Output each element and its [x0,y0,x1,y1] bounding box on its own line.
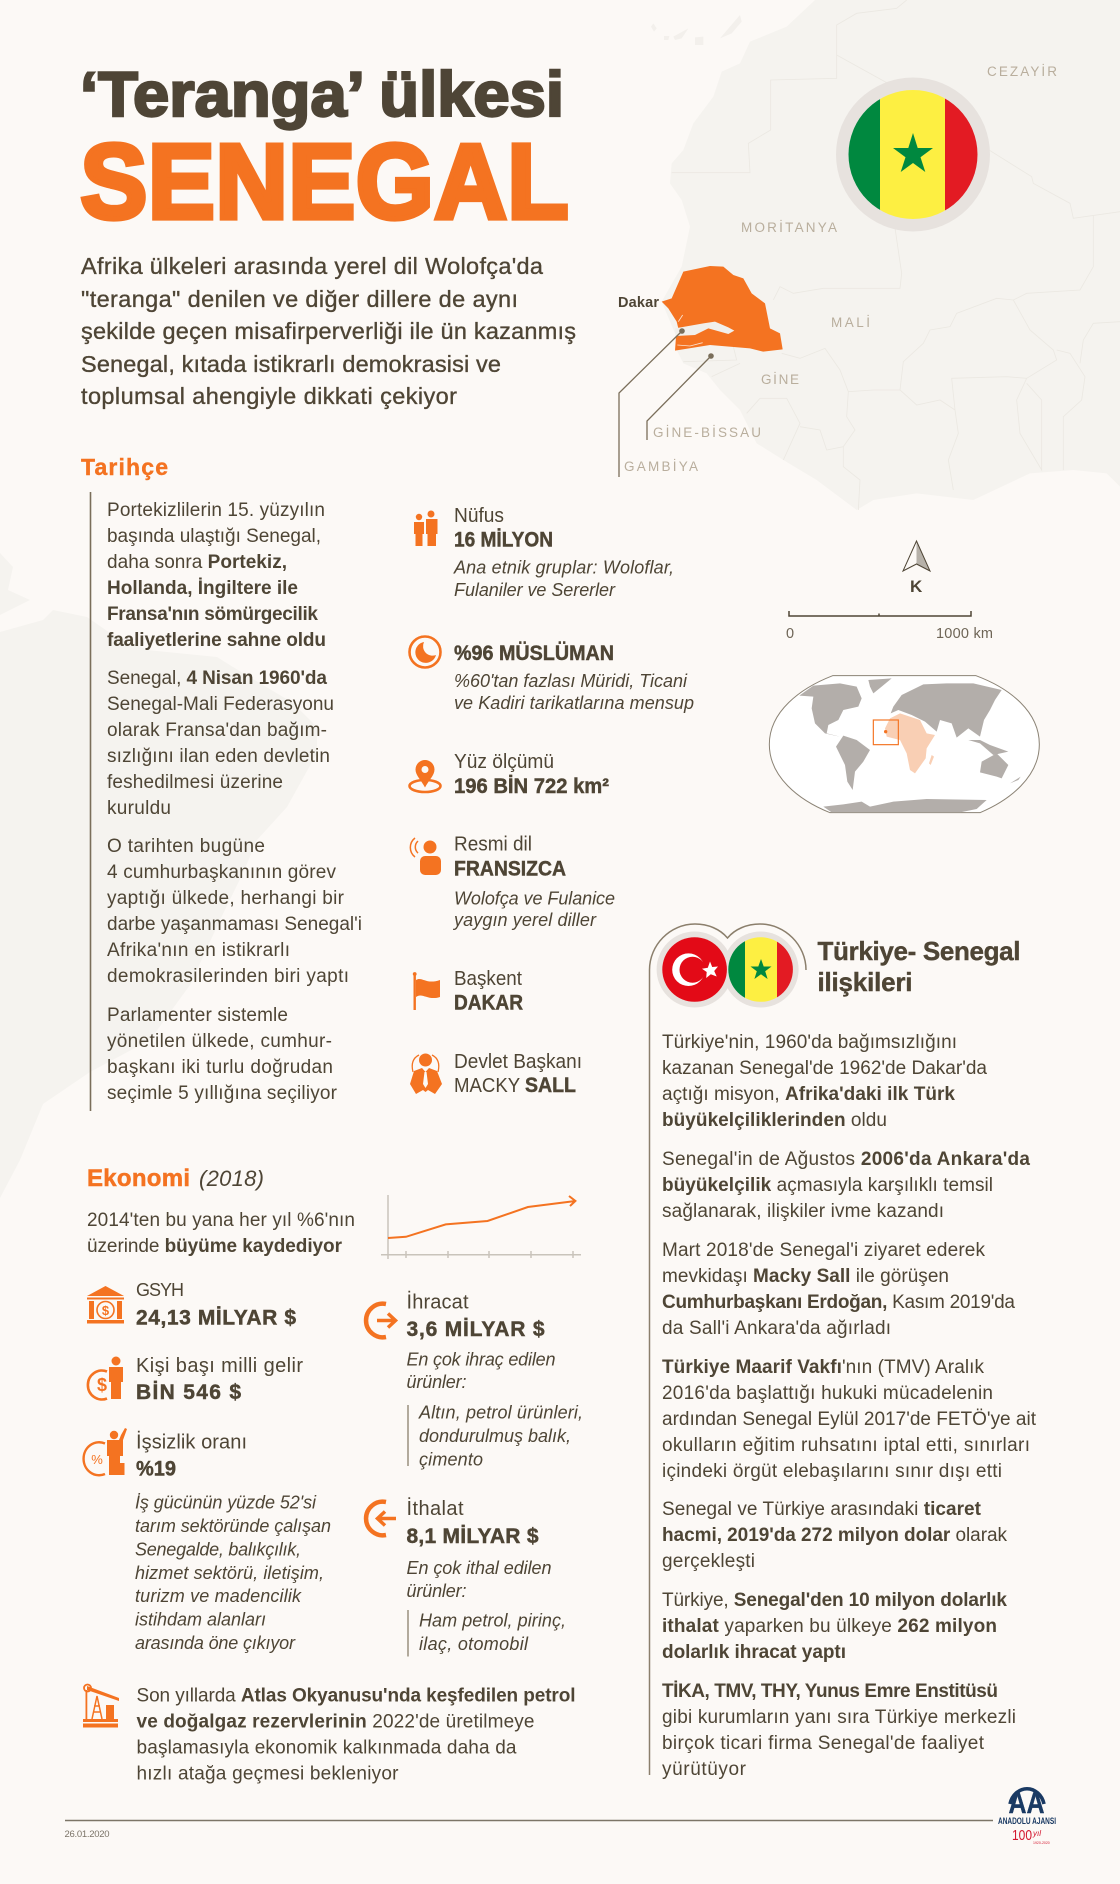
panel: history text: darbe yaşanmaması Senegal'i [107,914,362,935]
stat: religion: %96 MÜSLÜMAN [454,642,614,665]
panel: history text: Senegal, 4 Nisan 1960'da [107,668,327,689]
heading: Tarihçe: Tarihçe [81,454,168,480]
stat: president [410,1051,582,1097]
panel: history text: olarak Fransa'dan bağım- [107,720,327,741]
scale bar: 1000 km [936,626,993,642]
relations text: gerçekleşti [662,1551,755,1572]
stat: imports: En çok ithal edilen [406,1558,552,1578]
panel: history text: sızlığını ilan eden devletin [107,746,330,767]
logo: Anadolu Ajansı: 1920-2020 [1033,1841,1050,1845]
stat: exports: çimento [419,1450,483,1470]
stat: imports: ilaç, otomobil [419,1634,529,1654]
stat: unemployment: Senegalde, balıkçılık, [135,1540,301,1560]
stat: religion: ve Kadiri tarikatlarına mensup [454,693,694,713]
stat: imports: 8,1 MİLYAR $ [406,1525,539,1548]
stat: unemployment [84,1428,331,1653]
oil and gas text [136,1686,576,1784]
stat: president: MACKY SALL [454,1074,576,1097]
icon: person and dollar [88,1356,123,1400]
icon: export arrow [366,1304,396,1337]
relations text: dolarlık ihracat yaptı [662,1642,846,1663]
icon: bank: $ [102,1303,110,1318]
intro text: Afrika ülkeleri arasında yerel dil Wolofça'da [81,253,544,279]
intro text: şekilde geçen misafirperverliği ile ün kazanmış [81,318,576,344]
stat: unemployment: turizm ve madencilik [135,1586,302,1606]
icon: speaker [410,838,441,875]
intro text: Senegal, kıtada istikrarlı demokrasisi ve [81,351,501,377]
relations text: kazanan Senegal'de 1962'de Dakar'da [662,1058,987,1079]
scale bar: 0 [786,626,794,642]
icon: bank [87,1286,124,1324]
stat: exports [366,1290,583,1470]
icon: crescent [410,636,440,668]
stat: capital [413,968,523,1014]
panel: history text: seçimle 5 yıllığına seçiliyor [107,1083,338,1104]
relations text: Mart 2018'de Senegal'i ziyaret ederek [662,1240,986,1261]
date: 26.01.2020 [64,1829,110,1840]
heading: Ekonomi: (2018) [199,1166,264,1191]
stat: unemployment: hizmet sektörü, iletişim, [135,1563,324,1583]
panel: history text: demokrasilerinden biri yaptı [107,966,349,987]
icon: import arrow [366,1502,396,1535]
stat: imports: İthalat [406,1497,464,1520]
intro text: "teranga" denilen ve diğer dillere de aynı [81,286,518,312]
panel: history text: feshedilmesi üzerine [107,772,283,793]
stat: exports: İhracat [406,1290,469,1314]
panel: history text: başkanı iki turlu doğrudan [107,1057,333,1078]
relations text: hacmi, 2019'da 272 milyon dolar olarak [662,1525,1008,1546]
country labels: GAMBİYA [624,459,698,474]
panel: history text [90,492,362,1111]
relations text: sağlanarak, ilişkiler ivme kazandı [662,1201,944,1222]
world locator map [769,676,1039,813]
oil and gas text: ve doğalgaz rezervlerinin 2022'de üretilmeye [136,1712,534,1732]
relations text: büyükelçiliklerinden oldu [662,1110,887,1131]
stat: language: Wolofça ve Fulanice [454,888,615,908]
stat: population: Nüfus [454,505,504,527]
stat: unemployment: arasında öne çıkıyor [135,1633,296,1653]
relations text: Türkiye'nin, 1960'da bağımsızlığını [662,1032,957,1053]
label: Dakar: Dakar [618,295,659,311]
stat: capital: DAKAR [454,992,523,1014]
heading [818,936,1020,997]
stat: language [410,834,615,930]
stat: population [414,505,674,600]
icon: Turkish and Senegal flags [657,932,799,1008]
intro text [81,253,576,409]
scale bar [786,611,993,642]
panel: history text: Afrika'nın en istikrarlı [107,940,290,961]
stat: imports: ürünler: [406,1581,466,1601]
relations text: gibi kurumların yanı sıra Türkiye merkezli [662,1707,1016,1728]
relations text: okulların eğitim ruhsatını iptal etti, sınırları [662,1435,1030,1456]
panel: history text: O tarihten bugüne [107,836,265,857]
relations text: büyükelçilik açmasıyla karşılıklı temsil [662,1175,993,1196]
relations text: Senegal ve Türkiye arasındaki ticaret [662,1499,982,1520]
economy growth text [87,1210,355,1257]
country labels [624,64,1057,474]
intro text: toplumsal ahengiyle dikkati çekiyor [81,383,457,409]
icon: oil pump [83,1684,119,1728]
stat: imports: Ham petrol, pirinç, [419,1610,566,1630]
stat: GDP [87,1280,296,1330]
title: SENEGAL [80,122,568,241]
title: ‘Teranga’ ülkesi [80,60,564,130]
relations text: ardından Senegal Eylül 2017'de FETÖ'ye ait [662,1409,1037,1430]
stat: area: Yüz ölçümü [454,751,554,773]
country labels: GİNE [761,372,799,387]
stat: exports: Altın, petrol ürünleri, [418,1402,583,1422]
relations text: mevkidaşı Macky Sall ile görüşen [662,1266,949,1287]
relations text: Cumhurbaşkanı Erdoğan, Kasım 2019'da [662,1292,1015,1313]
stat: president: Devlet Başkanı [454,1051,582,1073]
economy growth text: 2014'ten bu yana her yıl %6'nın [87,1210,355,1231]
logo: Anadolu Ajansı: yıl [1032,1829,1041,1838]
heading: Türkiye- Senegal [818,936,1020,966]
economy growth text: üzerinde büyüme kaydediyor [87,1236,343,1257]
icon: Senegal flag [836,78,990,232]
panel: history text: yaptığı ülkede, herhangi bir [107,888,345,909]
stat: unemployment: %19 [136,1458,176,1480]
relations text [662,1032,1037,1780]
panel: history text: 4 cumhurbaşkanının görev [107,862,336,883]
relations text: birçok ticari firma Senegal'de faaliyet [662,1733,985,1754]
panel: history text: yönetilen ülkede, cumhur- [107,1031,332,1052]
relations text: Türkiye Maarif Vakfı'nın (TMV) Aralık [662,1357,984,1378]
stat: religion [410,636,694,713]
icon: people [414,510,438,546]
relations text: içindeki örgüt elebaşılarını sınır dışı etti [662,1461,1002,1482]
icon: compass north arrow [903,541,930,596]
stat: population: Fulaniler ve Sererler [454,580,616,600]
stat: income: BİN 546 $ [136,1381,241,1404]
oil and gas text: başlamasıyla ekonomik kalkınmada daha da [136,1738,517,1758]
logo: Anadolu Ajansı: ANADOLU AJANSI [998,1816,1056,1826]
logo: Anadolu Ajansı [998,1787,1056,1845]
continents [799,678,1021,812]
stat: unemployment: İş gücünün yüzde 52'si [135,1492,317,1512]
icon: president [410,1054,442,1094]
relations text: ithalat yaparken bu ülkeye 262 milyon [662,1616,997,1637]
stat: population: 16 MİLYON [454,528,553,552]
panel: history text: Portekizlilerin 15. yüzyılın [107,500,325,521]
relations text: açtığı misyon, Afrika'daki ilk Türk [662,1084,955,1105]
line chart: growth [381,1195,581,1259]
stat: unemployment: istihdam alanları [135,1610,266,1630]
stat: unemployment: tarım sektöründe çalışan [135,1516,331,1536]
stat: exports: 3,6 MİLYAR $ [406,1318,545,1341]
icon: location pin [410,760,440,792]
icon: compass north arrow: K [910,577,923,596]
relations text: Türkiye, Senegal'den 10 milyon dolarlık [662,1590,1007,1611]
relations text: Senegal'in de Ağustos 2006'da Ankara'da [662,1149,1030,1170]
stat: language: yaygın yerel diller [452,910,597,930]
title [80,60,568,241]
leader lines [619,328,714,477]
relations text: da Sall'i Ankara'da ağırladı [662,1318,891,1339]
stat: language: FRANSIZCA [454,858,566,880]
icon: person and dollar: $ [97,1375,107,1395]
logo: Anadolu Ajansı: 100 [1012,1827,1032,1844]
country labels: CEZAYİR [987,64,1057,79]
relations text: TİKA, TMV, THY, Yunus Emre Enstitüsü [662,1681,998,1702]
relations text: yürütüyor [662,1759,747,1780]
panel: history text: Fransa'nın sömürgecilik [107,604,318,625]
map: west Africa background [651,0,1120,510]
heading: ilişkileri [818,967,912,997]
stat: religion: %60'tan fazlası Müridi, Ticani [454,671,688,691]
stat: exports: dondurulmuş balık, [419,1426,571,1446]
stat: unemployment: İşsizlik oranı [136,1430,247,1454]
stat: area: 196 BİN 722 km² [454,775,609,798]
panel: Türkiye-Senegal relations [650,924,1037,1780]
stat: exports: En çok ihraç edilen [406,1350,556,1370]
relations text: 2016'da başlattığı hukuki mücadelenin [662,1383,993,1404]
panel: history text: Senegal-Mali Federasyonu [107,694,334,715]
oil and gas text: Son yıllarda Atlas Okyanusu'nda keşfedilen petrol [136,1686,576,1706]
icon: person and percent: % [91,1452,103,1467]
icon: person and percent [84,1428,127,1475]
stat: income: Kişi başı milli gelir [136,1355,303,1377]
stat: exports: ürünler: [406,1372,466,1392]
heading: Ekonomi: Ekonomi [87,1165,190,1192]
Africa [885,713,935,773]
stat: area [410,751,609,798]
map: Senegal highlighted [662,266,783,352]
oil and gas text: hızlı atağa geçmesi bekleniyor [136,1764,399,1784]
stat: capital: Başkent [454,968,522,990]
stat: GDP: GSYH [136,1280,184,1300]
stat: income [88,1355,303,1404]
country labels: MORİTANYA [741,220,837,235]
stat: GDP: 24,13 MİLYAR $ [136,1306,296,1330]
map: South America background [0,553,317,1198]
panel: history text: daha sonra Portekiz, [107,552,287,573]
country labels: MALİ [831,315,870,330]
stat: imports [366,1497,566,1656]
panel: history text: faaliyetlerine sahne oldu [107,630,326,651]
icon: flag [413,972,440,1010]
country labels: GİNE-BİSSAU [653,425,761,440]
footer rule [65,1820,993,1822]
heading: Ekonomi [87,1165,264,1192]
stat: language: Resmi dil [454,834,532,856]
panel: history text: Parlamenter sistemle [107,1005,288,1026]
stat: population: Ana etnik gruplar: Woloflar, [453,558,674,578]
panel: history text: Hollanda, İngiltere ile [107,578,298,599]
panel: history text: kuruldu [107,798,171,819]
panel: history text: başında ulaştığı Senegal, [107,526,321,547]
logo: Anadolu Ajansı: AA [1008,1787,1044,1820]
